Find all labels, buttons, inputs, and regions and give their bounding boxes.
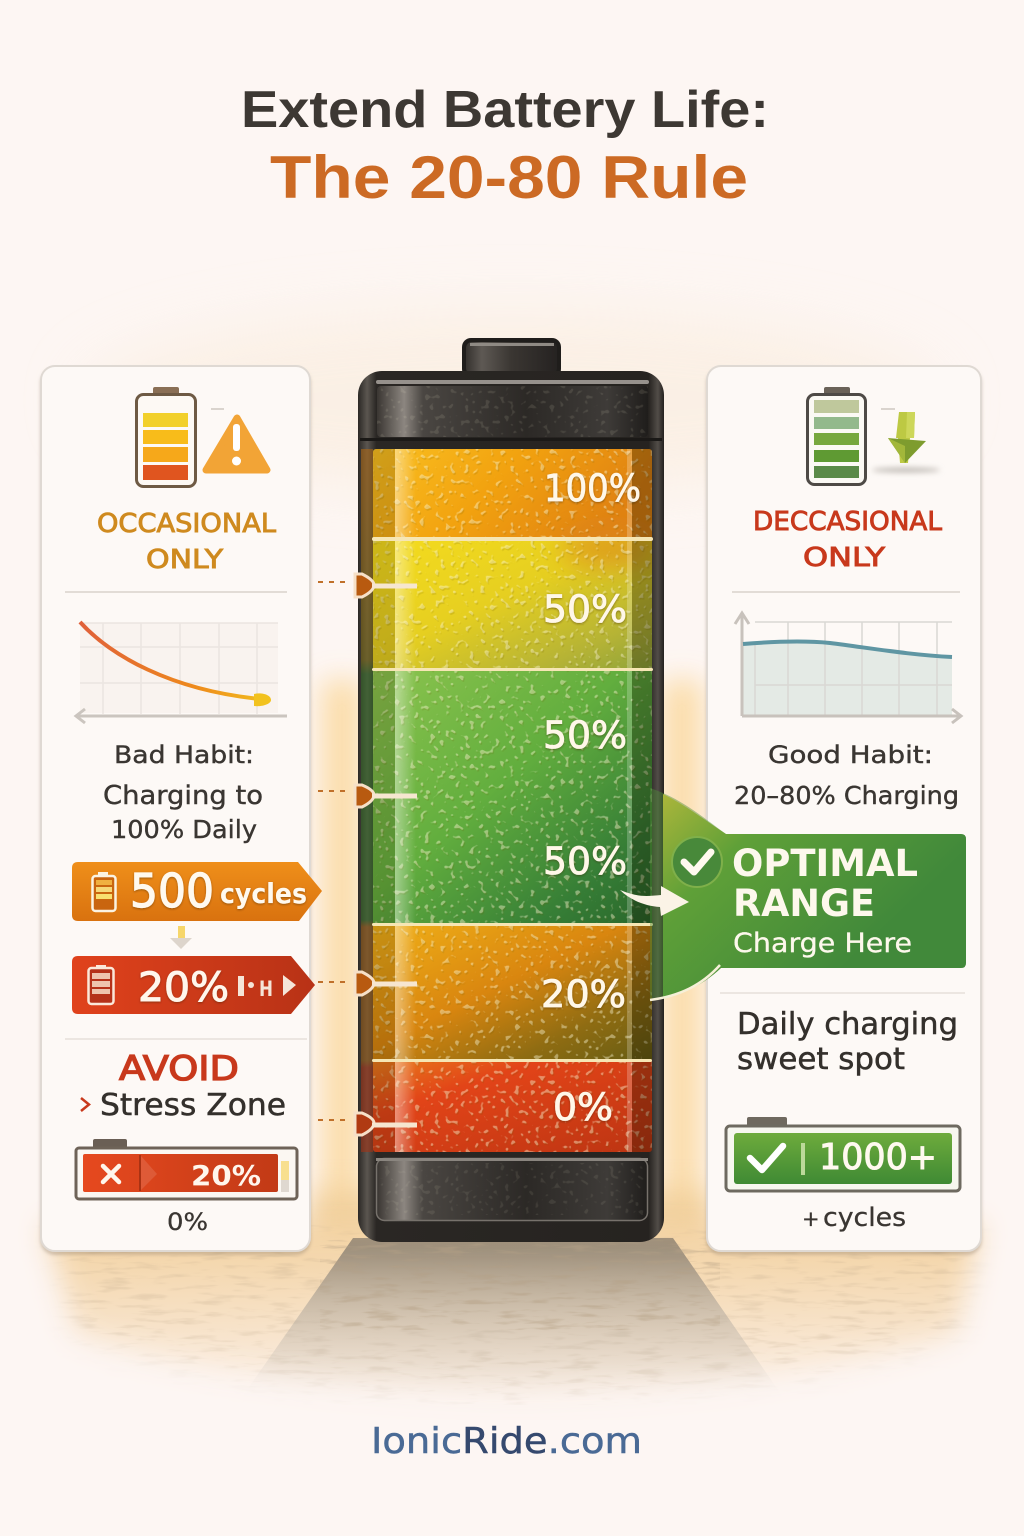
text: bad habit: 100% Daily — [111, 815, 257, 844]
heading: deccasional only — [753, 507, 943, 573]
icon: battery 1000+: 1000+ — [819, 1137, 937, 1178]
chart: stable capacity curve — [735, 613, 961, 723]
footer: site name: IonicRide.com — [371, 1421, 642, 1462]
arrow: into callout — [620, 886, 689, 916]
title: The 20-80 Rule — [270, 144, 748, 211]
percent labels: 50% — [543, 840, 627, 883]
battery base — [376, 1158, 648, 1220]
text: avoid stress zone — [81, 1049, 286, 1123]
battery terminal — [462, 338, 561, 378]
text: bad habit: Bad Habit: — [114, 741, 254, 769]
battery casing — [358, 371, 664, 1242]
panel: bad habit — [41, 366, 322, 1251]
battery — [318, 338, 664, 1242]
heading: occasional only: ONLY — [146, 545, 223, 575]
badge: 20%: 20% — [138, 965, 229, 1011]
percent labels: 20% — [541, 973, 626, 1016]
heading: occasional only: OCCASIONAL — [97, 509, 277, 539]
text: avoid stress zone: AVOID — [119, 1049, 239, 1089]
callout text: OPTIMAL — [732, 842, 918, 885]
badge: 500 cycles: cycles — [220, 877, 307, 910]
percent labels: 0% — [553, 1086, 613, 1129]
percent labels: 50% — [543, 714, 627, 757]
text: sweet spot — [737, 1007, 958, 1077]
heading: deccasional only: ONLY — [803, 543, 885, 573]
callout text: RANGE — [733, 882, 875, 925]
level markers — [318, 574, 417, 1135]
icon: low battery 20%: 20% — [191, 1159, 261, 1192]
text: 0%: 0% — [167, 1208, 208, 1236]
icon: check circle — [672, 837, 722, 887]
icon: green battery with arrow — [808, 387, 940, 484]
ground with battery shadow — [34, 1218, 992, 1405]
arrow: down — [170, 926, 192, 949]
badge: 500 cycles — [72, 862, 322, 921]
title — [241, 81, 769, 211]
panel: good habit — [707, 366, 981, 1251]
text: bad habit — [103, 741, 263, 844]
level dividers — [372, 537, 653, 1062]
text: plus cycles: + — [802, 1207, 820, 1231]
badge: 20%: H — [259, 977, 273, 1001]
chart: declining capacity curve — [76, 622, 287, 723]
text: plus cycles: cycles — [823, 1203, 906, 1233]
percent labels: 50% — [543, 588, 627, 631]
title: Extend Battery Life: — [241, 81, 769, 139]
callout text — [732, 842, 918, 959]
text: good habit — [734, 741, 959, 810]
callout text: Charge Here — [733, 928, 912, 959]
percent labels: 100% — [544, 467, 641, 510]
text: sweet spot: Daily charging — [737, 1007, 958, 1042]
text: bad habit: Charging to — [103, 781, 263, 811]
text: good habit: Good Habit: — [768, 741, 933, 769]
percent labels — [541, 467, 641, 1129]
icon: battery with warning — [136, 387, 267, 486]
heading: deccasional only: DECCASIONAL — [753, 507, 943, 537]
text: good habit: 20–80% Charging — [734, 781, 959, 810]
badge: 20% — [72, 956, 315, 1014]
icon: battery 1000+ — [726, 1117, 960, 1191]
heading: occasional only — [97, 509, 277, 575]
battery charge levels — [373, 449, 660, 1154]
badge: 500 cycles: 500 — [130, 864, 214, 918]
callout: optimal range — [620, 788, 966, 1000]
text: avoid stress zone: Stress Zone — [100, 1088, 286, 1123]
text: sweet spot: sweet spot — [737, 1042, 905, 1077]
icon: low battery 20% — [76, 1139, 297, 1199]
